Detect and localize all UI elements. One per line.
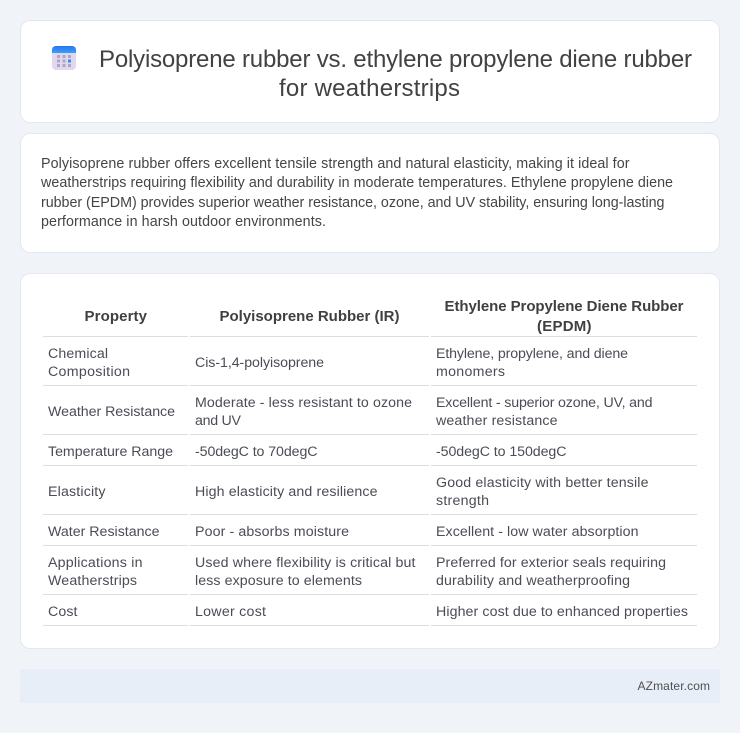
row: weather resistance	[48, 395, 652, 429]
intro text: Polyisoprene rubber offers excellent tensile strength and natural elasticity, making it ideal for	[41, 156, 630, 172]
header panel	[20, 20, 720, 123]
table header: (EPDM)	[537, 318, 592, 335]
title: for weatherstrips	[279, 75, 460, 102]
row: temperature range: Temperature Range	[48, 444, 173, 460]
table rules	[43, 336, 697, 626]
intro panel	[20, 133, 720, 253]
intro text: rubber (EPDM) provides superior weather resistance, ozone, and UV stability, ensuring long-lasting	[41, 195, 665, 211]
row: weather resistance: Excellent - superior ozone, UV, and	[436, 395, 652, 411]
row: cost: Cost	[48, 604, 78, 620]
row: chemical composition: Chemical	[48, 346, 108, 362]
row: cost: Lower cost	[195, 604, 266, 620]
row: elasticity: Good elasticity with better tensile	[436, 475, 649, 491]
row: water resistance	[48, 524, 638, 540]
row: chemical composition: monomers	[436, 364, 505, 380]
row: weather resistance: and UV	[195, 413, 242, 429]
intro text	[40, 156, 673, 230]
icon: calendar	[52, 46, 76, 70]
table header: Polyisoprene Rubber (IR)	[220, 308, 400, 325]
row: applications: Preferred for exterior seals requiring	[436, 555, 666, 571]
row: applications: Applications in	[48, 555, 142, 571]
row: cost	[48, 604, 688, 620]
row: elasticity: High elasticity and resilience	[195, 484, 378, 500]
row: chemical composition: Cis-1,4-polyisoprene	[195, 355, 324, 371]
row: temperature range	[48, 444, 566, 460]
row: chemical composition: Composition	[48, 364, 130, 380]
row: elasticity: strength	[436, 493, 489, 509]
row: cost: Higher cost due to enhanced properties	[436, 604, 688, 620]
row: applications: Weatherstrips	[48, 573, 137, 589]
row: weather resistance: Weather Resistance	[48, 404, 175, 420]
footer text: AZmater.com	[638, 679, 710, 693]
title	[99, 46, 692, 102]
row: water resistance: Water Resistance	[48, 524, 160, 540]
row: water resistance: Poor - absorbs moisture	[195, 524, 349, 540]
table header: Property	[84, 308, 148, 325]
row: elasticity	[48, 475, 649, 509]
table	[43, 298, 697, 626]
row: weather resistance: Moderate - less resistant to ozone	[195, 395, 412, 411]
table panel	[20, 273, 720, 649]
row: weather resistance: weather resistance	[435, 413, 558, 429]
row: applications: durability and weatherproofing	[436, 573, 630, 589]
row: temperature range: -50degC to 70degC	[195, 444, 318, 460]
row: elasticity: Elasticity	[48, 484, 106, 500]
table header	[84, 298, 684, 335]
row: temperature range: -50degC to 150degC	[436, 444, 566, 460]
intro text: weatherstrips requiring flexibility and durability in moderate temperatures. Ethylene propylene diene	[40, 175, 673, 191]
row: applications: less exposure to elements	[195, 573, 362, 589]
row: applications: Used where flexibility is critical but	[195, 555, 416, 571]
row: water resistance: Excellent - low water absorption	[436, 524, 638, 540]
intro text: performance in harsh outdoor environments.	[41, 214, 326, 230]
footer bar	[20, 669, 720, 703]
row: applications	[48, 555, 666, 589]
row: chemical composition	[48, 346, 628, 380]
table header: Ethylene Propylene Diene Rubber	[444, 298, 684, 315]
title: Polyisoprene rubber vs. ethylene propylene diene rubber	[99, 46, 692, 73]
row: chemical composition: Ethylene, propylene, and diene	[436, 346, 628, 362]
